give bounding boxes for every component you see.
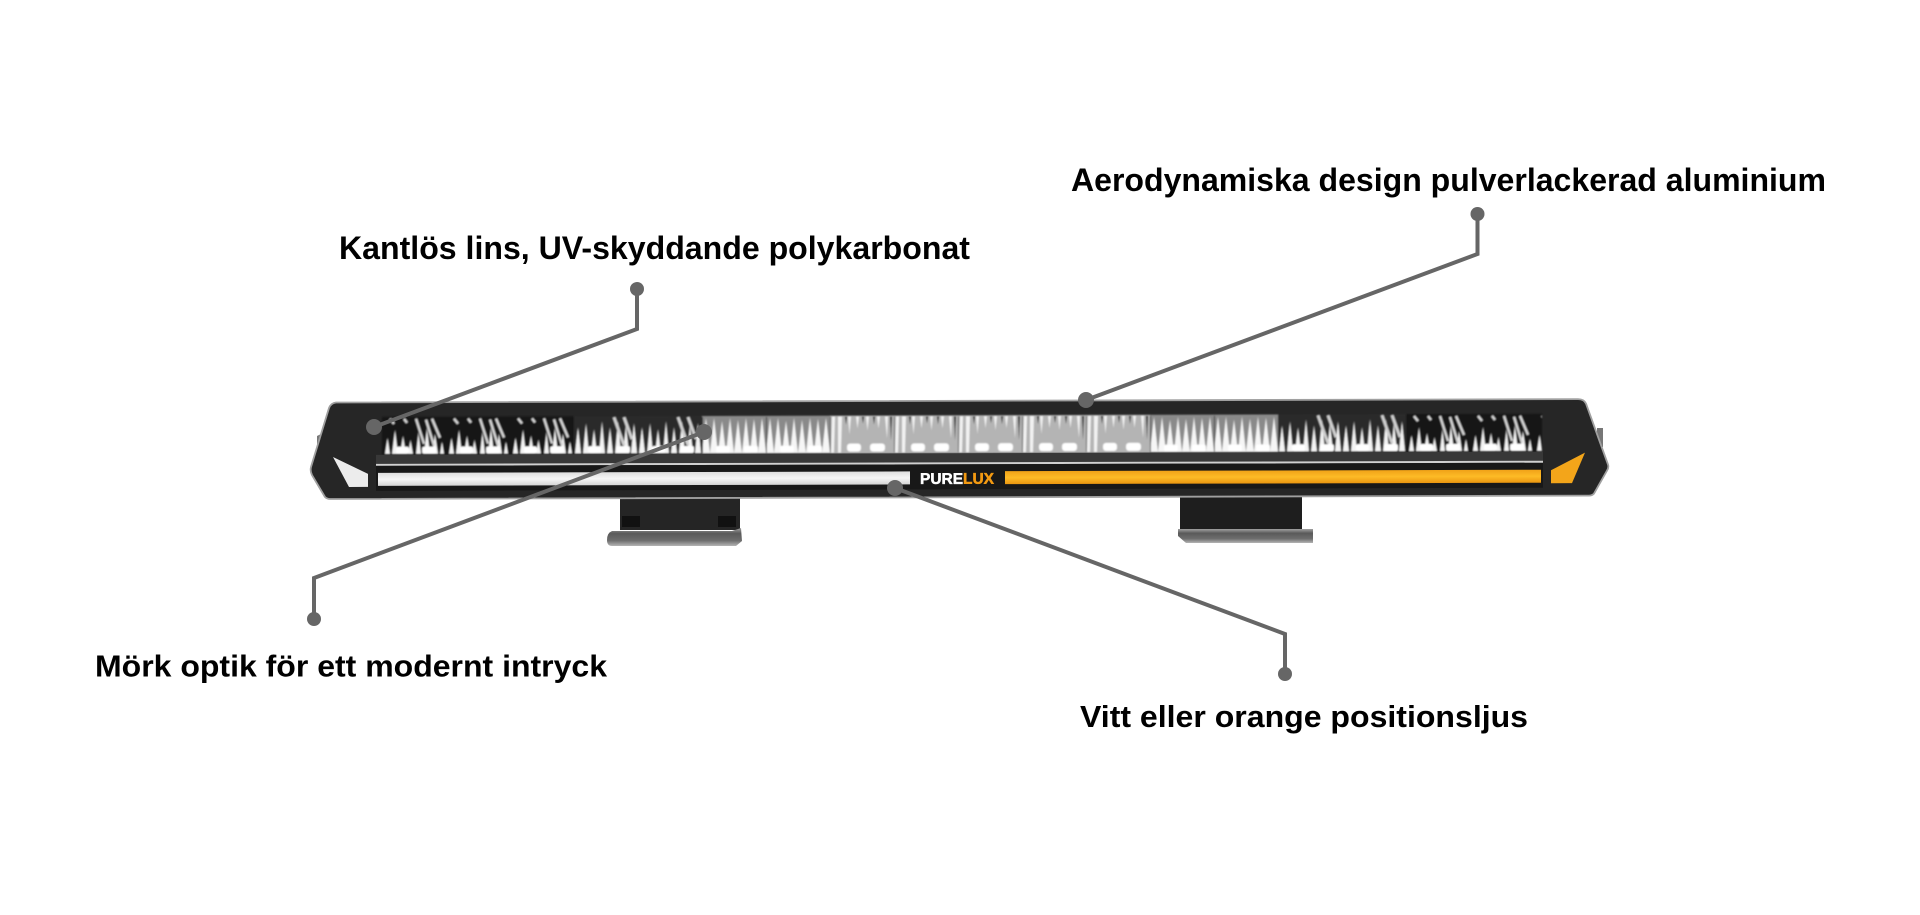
light bar (311, 399, 1608, 499)
white corner light (333, 457, 368, 487)
callout: aerodynamic leader (1078, 207, 1484, 408)
thin white line (376, 461, 1543, 466)
callout: dark optics leader (307, 424, 712, 626)
bar housing (311, 399, 1608, 499)
lens (382, 414, 1542, 455)
white position light strip (378, 471, 910, 486)
dark channel (376, 463, 1543, 491)
callout: position light leader (887, 480, 1292, 681)
label: position lights: Vitt eller orange positionsljus (1080, 699, 1528, 734)
label: aerodynamic design: Aerodynamiska design pulverlackerad aluminium (1071, 162, 1826, 198)
callout: lens leader (366, 282, 644, 435)
side mount bump: left (317, 433, 323, 453)
logo: PURELUX (920, 471, 995, 488)
mounting bracket: left (607, 498, 742, 546)
amber corner light (1551, 453, 1585, 483)
lens lower strip (376, 452, 1543, 464)
side mount bump: right (1597, 428, 1603, 447)
label: frameless lens: Kantlös lins, UV-skyddande polykarbonat (339, 230, 970, 266)
label: dark optics: Mörk optik för ett modernt intryck (95, 648, 608, 684)
amber position light strip (1005, 470, 1541, 484)
mounting bracket: right (1178, 495, 1313, 543)
